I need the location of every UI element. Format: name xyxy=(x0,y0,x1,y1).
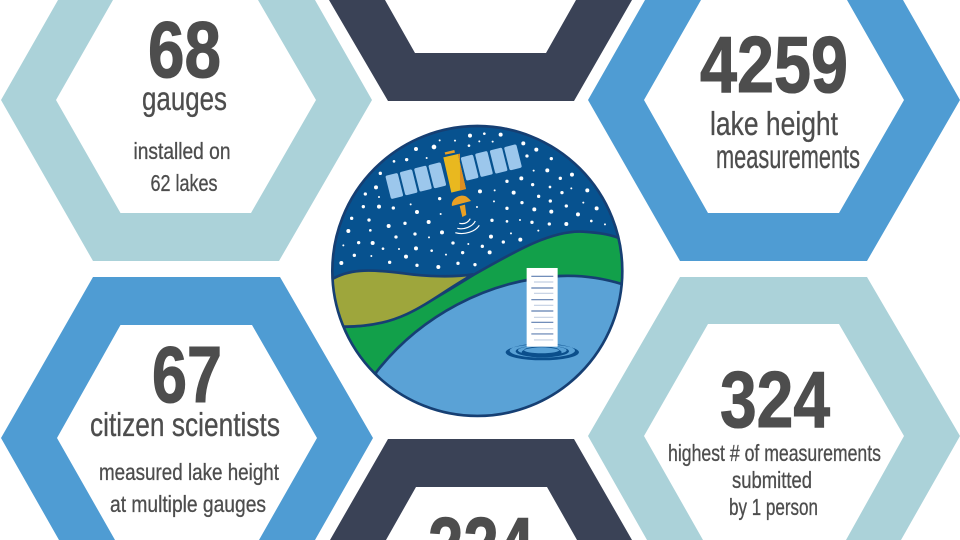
hexagon ring: blue xyxy=(588,0,960,261)
hexagon ring: dark navy, cropped xyxy=(330,439,632,540)
panel: top centre hexagon xyxy=(329,0,632,101)
lake gauge xyxy=(527,268,558,347)
hexagon ring: light teal xyxy=(1,0,372,261)
value: 67: 67 xyxy=(152,330,222,419)
label: citizen scientists: citizen scientists xyxy=(90,406,280,443)
value: 4259: 4259 xyxy=(700,20,848,109)
hexagon ring: light teal xyxy=(588,277,960,540)
note: at multiple gauges: at multiple gauges xyxy=(110,491,266,517)
lake xyxy=(375,274,620,415)
olive field xyxy=(328,271,473,327)
antenna dish xyxy=(452,196,471,206)
water ripples xyxy=(506,344,579,360)
green hillside xyxy=(346,230,621,372)
note: measured lake height: measured lake height xyxy=(99,459,279,485)
panel: 224 bottom centre hexagon xyxy=(330,439,632,540)
hexagon ring: dark navy, cropped xyxy=(329,0,632,101)
hexagon ring: blue xyxy=(1,277,373,540)
body xyxy=(443,154,466,193)
note: submitted: submitted xyxy=(732,467,812,493)
logo outline xyxy=(332,126,622,416)
note: by 1 person: by 1 person xyxy=(729,494,818,520)
value: 68: 68 xyxy=(148,5,221,94)
note: 62 lakes: 62 lakes xyxy=(150,170,218,196)
solar panels xyxy=(385,144,522,199)
note: installed on: installed on xyxy=(134,138,230,164)
note: highest # of measurements: highest # of measurements xyxy=(668,440,881,466)
label: gauges: gauges xyxy=(142,80,227,117)
satellite xyxy=(385,144,522,234)
label: measurements: measurements xyxy=(716,138,860,175)
panel: 4259 measurements xyxy=(588,0,960,261)
logo: satellite over lake xyxy=(328,126,630,420)
panel: 67 citizen scientists xyxy=(1,277,373,540)
label: lake height: lake height xyxy=(710,105,838,142)
panel: 68 gauges xyxy=(1,0,372,261)
radio signal xyxy=(455,219,479,234)
panel: 324 highest measurements xyxy=(588,277,960,540)
stars xyxy=(339,132,606,269)
night sky xyxy=(332,126,622,416)
value: 324: 324 xyxy=(720,355,830,444)
